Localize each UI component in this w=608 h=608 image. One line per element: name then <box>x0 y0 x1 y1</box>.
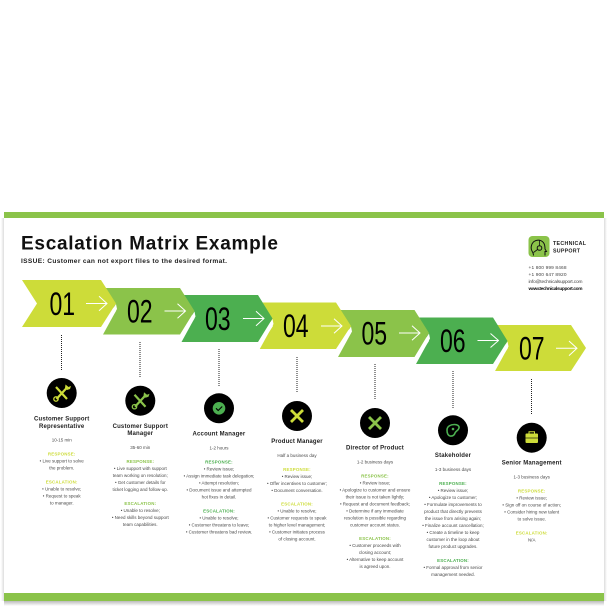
column 6: stakeholder <box>422 371 484 577</box>
response text: • Document issue and attempted <box>186 488 252 492</box>
escalation text <box>186 508 252 534</box>
chevron sequence <box>22 280 586 372</box>
response text: RESPONSE: <box>126 459 154 464</box>
dotted connector <box>530 379 532 415</box>
chevron 02: 02 <box>127 294 153 329</box>
escalation text: • Customer threatens to leave; <box>189 522 249 528</box>
chevron 03 <box>180 295 274 350</box>
response text: • Review issue; <box>282 474 312 479</box>
role heading: Customer Support <box>113 424 168 430</box>
chevron 02 <box>101 288 196 342</box>
escalation text <box>347 536 404 569</box>
response time: 35-60 min <box>130 445 151 450</box>
company name: TECHNICAL <box>553 241 587 247</box>
escalation text: • Customer proceeds with <box>349 543 401 548</box>
chevron 01: 01 <box>50 286 75 322</box>
response text <box>184 460 254 500</box>
role heading: Director of Product <box>346 446 404 452</box>
response text <box>267 467 327 493</box>
role heading: Representative <box>39 424 85 430</box>
escalation text <box>516 530 548 542</box>
escalation text: ESCALATION: <box>516 530 548 535</box>
icon: crossed tools <box>47 378 77 408</box>
escalation text <box>42 480 81 506</box>
escalation text: of closing account. <box>278 536 316 542</box>
icon: crossed pencils <box>282 401 312 431</box>
role heading <box>113 424 168 437</box>
response text: • Determine if any immediate <box>346 508 404 513</box>
role heading: Stakeholder <box>435 453 472 459</box>
escalation text: • Unable to resolve; <box>121 508 160 513</box>
response text: • Offer incentives to customer; <box>267 481 327 486</box>
response text <box>502 488 561 521</box>
response text: • Finalize account cancellation; <box>422 523 484 528</box>
response text: • Formulate improvements to <box>424 502 482 507</box>
response time: 1-2 business days <box>357 460 394 464</box>
response text: RESPONSE: <box>361 473 389 478</box>
column 2: customer support manager <box>112 342 169 527</box>
response text: resolution is possible regarding <box>344 515 407 520</box>
escalation text: management needed. <box>431 572 475 577</box>
panel: document card <box>1 212 607 606</box>
escalation text: to higher level management; <box>269 522 325 528</box>
response text: • Get customer details for <box>115 480 166 485</box>
icon: support agent head <box>528 236 550 257</box>
response text: hot fixes in detail. <box>202 494 236 500</box>
company logo block: SUPPORT <box>553 248 581 254</box>
response text: RESPONSE: <box>518 488 546 493</box>
response text: RESPONSE: <box>439 481 467 486</box>
response text: customer account status. <box>350 522 400 527</box>
response text: • Create a timeline to keep <box>427 530 480 535</box>
escalation text: • Unable to resolve; <box>277 508 317 514</box>
icon: verified badge <box>204 393 234 423</box>
response text: • Assign immediate task delegation; <box>184 474 254 478</box>
response text: team working on resolution; <box>113 473 168 478</box>
response text <box>340 473 411 527</box>
chevron 05 <box>336 310 430 364</box>
title: Escalation Matrix Example <box>21 234 278 254</box>
escalation text: • Request to speak <box>43 494 81 498</box>
escalation text <box>423 558 483 577</box>
column 3: account manager <box>184 349 254 534</box>
company logo block <box>528 236 587 292</box>
escalation text: ESCALATION: <box>359 536 391 541</box>
response time: 1-3 business days <box>514 474 551 480</box>
escalation text: team capabilities. <box>123 522 158 527</box>
dotted connector <box>296 357 298 393</box>
icon: steak shape <box>438 415 468 445</box>
role heading: Customer Support <box>34 416 89 422</box>
escalation text: N/A <box>528 537 535 542</box>
response text: • Review issue; <box>360 480 390 485</box>
escalation text: • Need skills beyond support <box>112 515 169 520</box>
chevron 05: 05 <box>362 316 387 351</box>
dotted connector <box>452 371 454 408</box>
escalation text: • Customer initiates process <box>269 530 326 534</box>
escalation text: • Customer threatens bad review. <box>186 530 252 534</box>
response text: • Sign off on course of action; <box>502 502 561 507</box>
chevron 03: 03 <box>205 301 231 337</box>
contact details: +1 900 647 8920 <box>528 272 567 278</box>
escalation text: • Unable to resolve; <box>199 516 239 520</box>
response time: 1-3 business days <box>435 467 472 472</box>
response text <box>422 481 484 549</box>
chevron 04 <box>258 302 352 357</box>
issue statement: ISSUE: Customer can not export files to the desired format. <box>21 258 227 265</box>
icon: crossed pencils <box>360 408 390 438</box>
column 1: customer support representative <box>34 335 89 506</box>
response text: the issue from arising again; <box>425 516 481 521</box>
chevron 07 <box>493 325 586 371</box>
response text: • Review issue; <box>516 495 547 500</box>
role heading <box>34 416 89 430</box>
response text: • Document conversation. <box>271 488 323 493</box>
escalation text: ESCALATION: <box>124 501 157 506</box>
response text: • Request and document feedback; <box>340 501 410 506</box>
response text: to solve issue. <box>517 516 546 521</box>
escalation text: to manager. <box>50 500 74 506</box>
chevron 07: 07 <box>519 331 545 366</box>
icon: briefcase <box>517 423 547 453</box>
response text: • Review issue; <box>438 488 468 493</box>
escalation text: ESCALATION: <box>46 480 78 484</box>
role heading: Product Manager <box>271 439 323 445</box>
escalation text: • Alternative to keep account <box>347 557 404 562</box>
response text <box>113 459 168 492</box>
response time: 10-15 min <box>52 438 72 442</box>
escalation text: is agreed upon. <box>359 564 391 569</box>
response text: future product upgrades. <box>428 544 478 549</box>
dotted connector <box>374 364 376 400</box>
response text: ticket logging and follow-up. <box>113 487 168 492</box>
escalation text <box>267 502 327 542</box>
response text: RESPONSE: <box>283 467 311 472</box>
dotted connector <box>139 342 141 378</box>
chevron 06: 06 <box>440 323 466 359</box>
escalation text: ESCALATION: <box>203 508 235 514</box>
response text: • Attempt resolution; <box>199 480 239 486</box>
escalation text: ESCALATION: <box>281 502 313 506</box>
response text: • Apologize to customer; <box>429 495 477 500</box>
column 7: senior management <box>502 379 562 542</box>
response text: customer in the loop about <box>426 537 480 542</box>
escalation text: • Formal approval from senior <box>423 565 483 570</box>
response text: RESPONSE: <box>205 460 233 464</box>
response text: product that directly prevents <box>424 509 483 514</box>
role heading: Manager <box>127 431 154 437</box>
chevron 04: 04 <box>283 308 309 344</box>
contact details: +1 800 999 8468 <box>528 265 567 271</box>
chevron 06 <box>414 318 508 372</box>
contact details: www.technicalsupport.com <box>528 286 582 292</box>
response text: • Review issue; <box>204 466 234 472</box>
column 5: director of product <box>340 364 411 569</box>
response text: • Live support to solve <box>40 458 84 464</box>
response time: 1-2 hours <box>209 446 229 450</box>
escalation text: closing account; <box>359 550 391 555</box>
response text: RESPONSE: <box>48 452 76 456</box>
response time: Half a business day <box>277 453 317 458</box>
response text: • Consider hiring new talent <box>504 509 560 514</box>
response text: • Apologize to customer and ensure <box>340 487 411 492</box>
contact details <box>528 265 582 292</box>
role heading: Senior Management <box>502 460 562 466</box>
response text <box>40 452 84 470</box>
escalation text: ESCALATION: <box>437 558 469 563</box>
response text: the problem. <box>49 466 74 470</box>
escalation text: • Unable to resolve; <box>42 486 81 492</box>
role heading: Account Manager <box>193 432 246 438</box>
escalation text: • Customer requests to speak <box>267 516 327 520</box>
column 4: product manager <box>267 357 327 542</box>
response text: their issue is not taken lightly; <box>346 494 404 499</box>
dotted connector <box>60 335 62 371</box>
chevron 01 <box>22 280 117 334</box>
contact details: info@technicalsupport.com <box>528 279 582 285</box>
icon: crossed tools <box>125 386 155 416</box>
dotted connector <box>218 349 220 386</box>
response text: • Live support with support <box>114 466 167 471</box>
escalation text <box>112 501 169 527</box>
